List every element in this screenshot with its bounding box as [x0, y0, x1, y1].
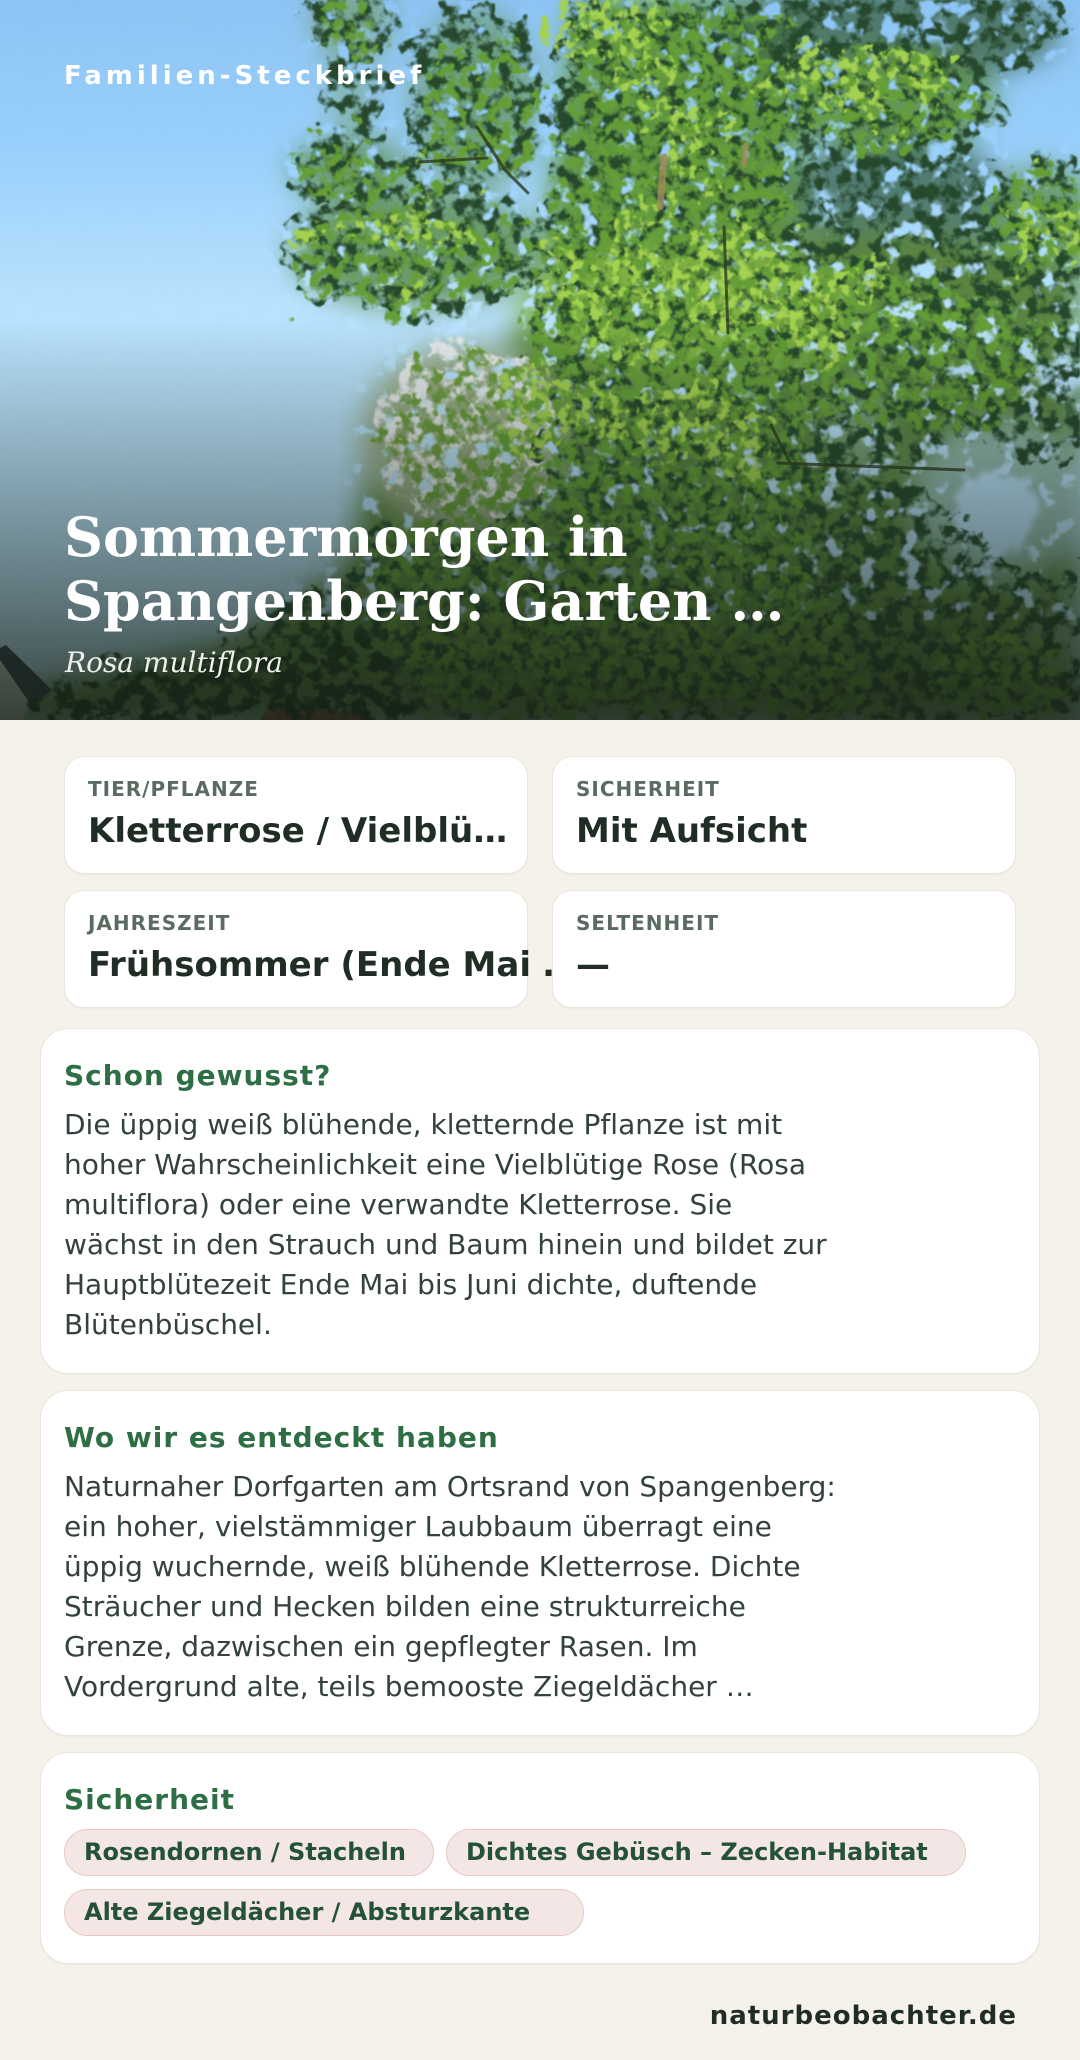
card: Schon gewusst: hoher Wahrscheinlichkeit eine Vielblütige Rose (Rosa [64, 1148, 806, 1181]
card: Schon gewusst: Schon gewusst? [64, 1059, 331, 1092]
tile: Tier/Pflanze: TIER/PFLANZE [88, 777, 259, 801]
card: Wo wir es entdeckt haben: Grenze, dazwischen ein gepflegter Rasen. Im [64, 1630, 698, 1663]
chip: Dichtes Gebüsch: Dichtes Gebüsch – Zecken-Habitat [466, 1838, 928, 1866]
blurred crown base colours [0, 0, 1080, 720]
hero photo: tree against sky [0, 0, 1080, 720]
card: Wo wir es entdeckt haben: Naturnaher Dorfgarten am Ortsrand von Spangenberg: [64, 1470, 836, 1503]
tile: Sicherheit [552, 756, 1016, 874]
chip: Rosendornen: Rosendornen / Stacheln [84, 1838, 406, 1866]
bright sunlit leaves [330, 0, 1066, 455]
white rose blossoms [360, 340, 570, 535]
tile: Jahreszeit: JAHRESZEIT [88, 911, 230, 935]
card: Sicherheit [40, 1752, 1040, 1964]
dark foliage mass [0, 0, 1080, 720]
card: Schon gewusst [40, 1028, 1040, 1374]
tile: Tier/Pflanze: Kletterrose / Vielblü… [88, 811, 507, 851]
card: Schon gewusst: multiflora) oder eine verwandte Kletterrose. Sie [64, 1188, 732, 1221]
card: Schon gewusst: wächst in den Strauch und Baum hinein und bildet zur [64, 1228, 827, 1261]
tile: Seltenheit: — [576, 945, 610, 985]
card: Wo wir es entdeckt haben [40, 1390, 1040, 1736]
card: Wo wir es entdeckt haben: üppig wuchernde, weiß blühende Kletterrose. Dichte [64, 1550, 801, 1583]
tile: Seltenheit: SELTENHEIT [576, 911, 719, 935]
mid-green leaves [290, 0, 1080, 730]
card: Sicherheit: Sicherheit [64, 1783, 235, 1816]
title: Sommermorgen in [64, 505, 628, 569]
title [64, 505, 784, 633]
tile: Sicherheit: SICHERHEIT [576, 777, 720, 801]
card: Wo wir es entdeckt haben: Vordergrund alte, teils bemooste Ziegeldächer … [64, 1670, 754, 1703]
chip: Alte Ziegeldächer [64, 1889, 584, 1936]
chip: Alte Ziegeldächer: Alte Ziegeldächer / Absturzkante [84, 1898, 530, 1926]
bush foreground [14, 625, 420, 720]
tile: Jahreszeit [64, 890, 528, 1008]
sky gaps in the crown [536, 22, 1080, 548]
card: Schon gewusst: Hauptblütezeit Ende Mai bis Juni dichte, duftende [64, 1268, 757, 1301]
tile: Sicherheit: Mit Aufsicht [576, 811, 807, 851]
footer: naturbeobachter.de: naturbeobachter.de [710, 2001, 1017, 2031]
card: Schon gewusst: Blütenbüschel. [64, 1308, 272, 1341]
tile: Tier/Pflanze [64, 756, 528, 874]
house roof and wall [0, 645, 372, 720]
chip: Dichtes Gebüsch [446, 1829, 966, 1876]
sky specks through the leaves [0, 0, 1080, 620]
chip: Rosendornen [64, 1829, 434, 1876]
kicker: Familien-Steckbrief: Familien-Steckbrief [64, 61, 425, 91]
card: Wo wir es entdeckt haben: Sträucher und Hecken bilden eine strukturreiche [64, 1590, 746, 1623]
card: Wo wir es entdeckt haben: Wo wir es entdeckt haben [64, 1421, 499, 1454]
trunk and branches [420, 127, 964, 470]
title: Spangenberg: Garten … [64, 569, 784, 633]
sky [0, 0, 1080, 720]
tile: Seltenheit [552, 890, 1016, 1008]
tile: Jahreszeit: Frühsommer (Ende Mai … [88, 945, 577, 985]
scientific name: Rosa multiflora [65, 646, 283, 679]
card: Schon gewusst: Die üppig weiß blühende, kletternde Pflanze ist mit [64, 1108, 782, 1141]
card: Wo wir es entdeckt haben: ein hoher, vielstämmiger Laubbaum überragt eine [64, 1510, 772, 1543]
dark gradient overlay [0, 0, 1080, 720]
